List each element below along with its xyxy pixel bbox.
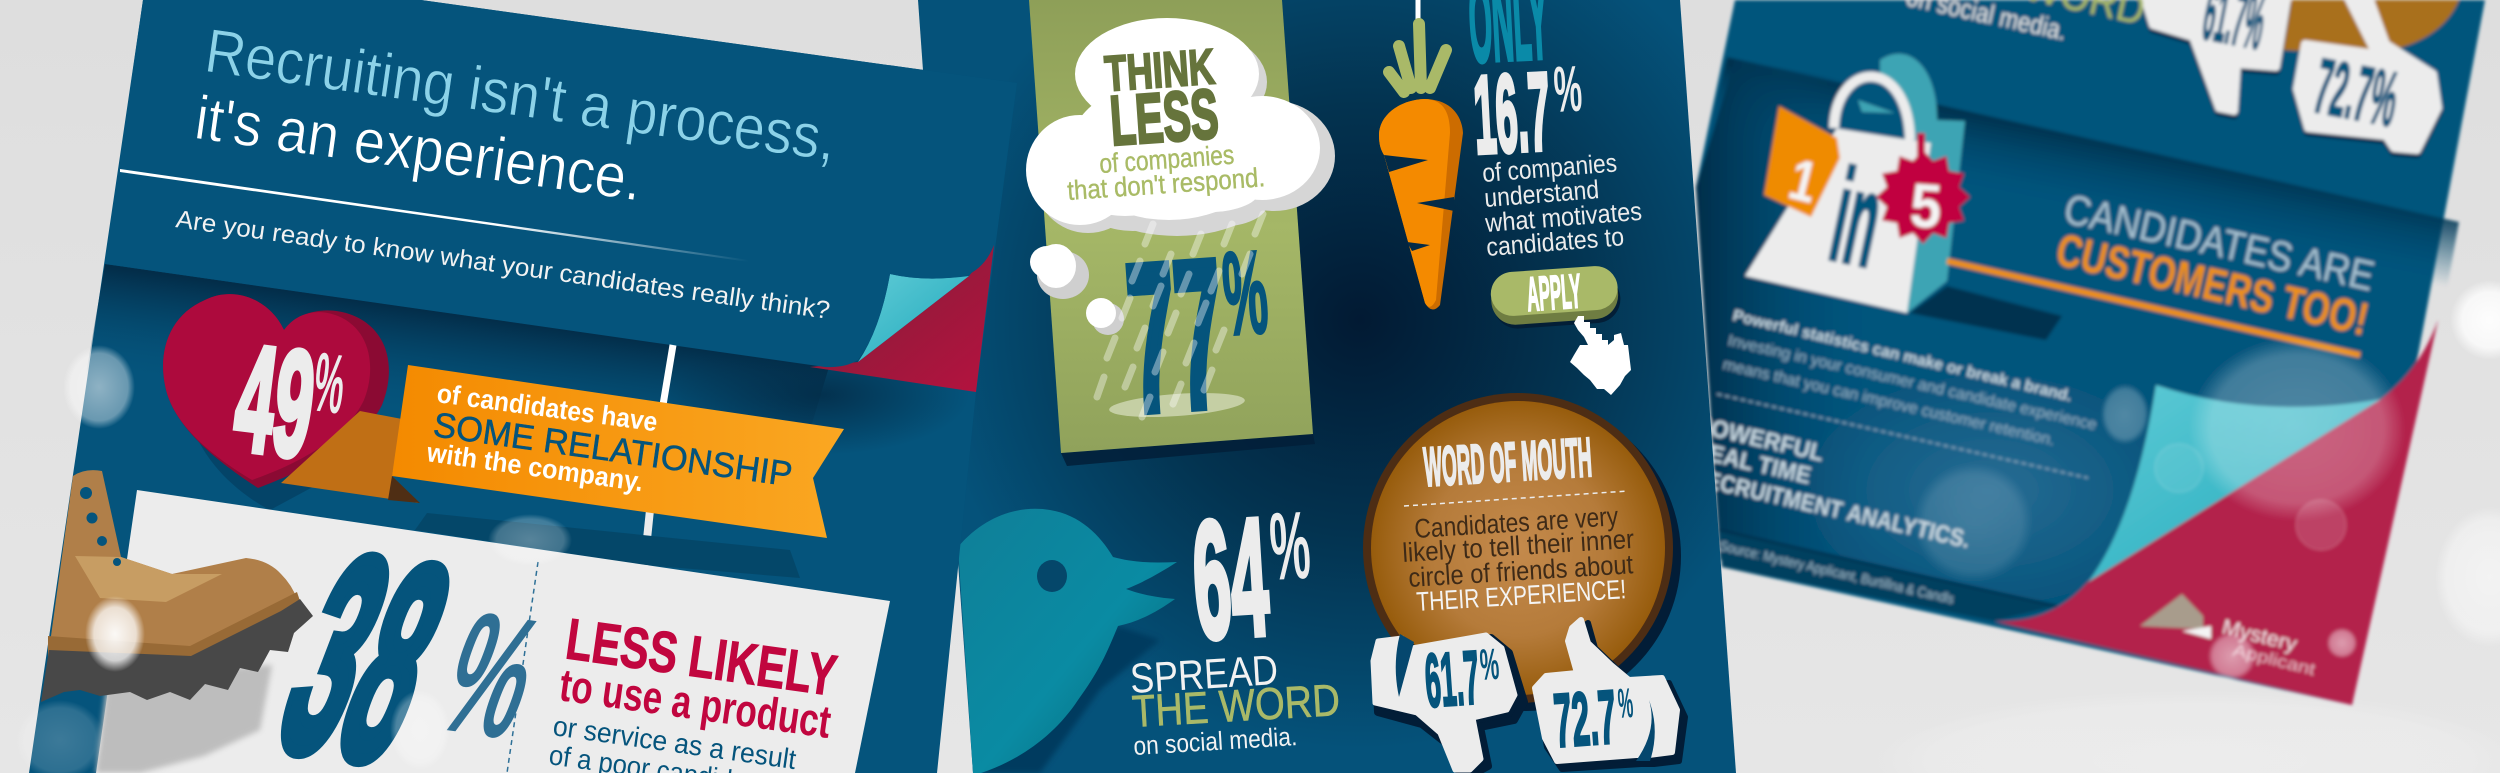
icon: thumb down xyxy=(1373,634,1524,773)
paragraph: word of mouth: likely to tell their inner xyxy=(1402,524,1635,568)
stat: 64 percent spread the word: on social media. xyxy=(1133,721,1298,761)
crimson page corner xyxy=(1994,320,2438,705)
icon: shopping bag 1 in 5: in xyxy=(1820,142,1894,295)
text: powerful real time recruitment analytics: POWERFUL xyxy=(1694,412,1826,467)
logo: mystery applicant: Mystery xyxy=(2220,616,2300,656)
text: motivates candidates: what motivates xyxy=(1483,196,1643,238)
icon: carrot on a string xyxy=(1379,0,1463,310)
icon: heart 49 percent: 49 xyxy=(227,313,323,489)
heading: candidates are customers too: CUSTOMERS TOO! xyxy=(2052,223,2373,345)
banner: some relationship: SOME RELATIONSHIP xyxy=(431,405,795,494)
stat: 64 percent spread the word: THE WORD xyxy=(1131,674,1341,737)
paragraph: word of mouth xyxy=(1402,501,1635,617)
panel: think less green card: % xyxy=(1219,226,1272,361)
stat: 77 percent xyxy=(1121,218,1272,456)
thumb up fragment xyxy=(2297,0,2438,150)
icon: rain cloud: that don't respond. xyxy=(1066,162,1266,206)
source note: Source: Mystery Applicant, Burtillna & Candls xyxy=(1718,537,1956,607)
stat: only 16.7 percent xyxy=(1466,0,1584,177)
stat: 64 percent spread the word xyxy=(1129,485,1341,761)
title: Recruiting isn't a process, xyxy=(201,17,840,174)
word of mouth fragment xyxy=(2281,0,2459,54)
text: motivates candidates: understand xyxy=(1483,174,1600,213)
panel: left poster xyxy=(15,0,1017,773)
heading: candidates are customers too xyxy=(2052,185,2379,345)
header sheet xyxy=(105,0,1017,367)
panel: word of mouth circle xyxy=(1363,393,1681,711)
icon: boot xyxy=(41,470,313,702)
text: powerful real time recruitment analytics: REAL TIME xyxy=(1691,437,1814,490)
paragraph: powerful statistics: Powerful statistics can make or break a brand. xyxy=(1731,307,2073,405)
stat: 64 percent spread the word: 64 xyxy=(1188,485,1273,674)
icon: thumb up: 72.7 xyxy=(1551,675,1619,764)
text: less likely: to use a product xyxy=(557,658,834,748)
subtitle: Are you ready to know what your candidates really think? xyxy=(174,205,832,325)
text: less likely xyxy=(547,607,841,773)
icon: thumb down: % xyxy=(1478,640,1501,690)
icon: rain cloud: LESS xyxy=(1108,75,1221,160)
icon: thumb up xyxy=(1535,620,1685,769)
banner: some relationship: of candidates have xyxy=(435,378,659,437)
panel: think less green card xyxy=(1026,0,1335,456)
stat: 64 percent spread the word: % xyxy=(1267,492,1313,601)
paragraph: powerful statistics: Investing in your consumer and candidate experience xyxy=(1726,332,2098,434)
text: powerful real time recruitment analytics xyxy=(1689,412,1972,554)
apply button xyxy=(1489,262,1622,330)
paragraph: word of mouth: Candidates are very xyxy=(1413,501,1619,544)
icon: rain cloud: of companies xyxy=(1098,140,1235,179)
icon: thumb up: % xyxy=(1616,679,1635,727)
text: less likely: LESS LIKELY xyxy=(562,607,841,709)
text: motivates candidates: candidates to xyxy=(1485,221,1625,262)
stat: 64 percent spread the word: SPREAD xyxy=(1129,646,1279,702)
panel: 38 percent white card xyxy=(41,470,890,773)
apply button: APPLY xyxy=(1525,265,1583,322)
cloud text: THINK xyxy=(1103,38,1216,102)
paragraph: powerful statistics: means that you can improve customer retention. xyxy=(1721,356,2056,449)
text: motivates candidates: of companies xyxy=(1481,147,1618,188)
icon: shopping bag 1 in 5: 1 xyxy=(1783,147,1824,216)
stat: only 16.7 percent: 16.7 xyxy=(1471,50,1553,177)
stat: 77 percent: 77 xyxy=(1121,218,1231,456)
icon: heart 49 percent: % xyxy=(309,335,350,432)
icon: shopping bag 1 in 5 xyxy=(1745,54,2062,340)
panel: word of mouth circle: WORD OF MOUTH xyxy=(1422,426,1593,498)
stat: only 16.7 percent: % xyxy=(1552,52,1584,126)
icon: pointer hand xyxy=(1570,316,1631,395)
icon: bird xyxy=(958,509,1177,773)
crimson page corner xyxy=(810,245,994,392)
icon: small clouds xyxy=(1030,244,1124,335)
teal page curl xyxy=(2088,385,2381,582)
icon: shopping bag 1 in 5: 5 xyxy=(1908,171,1944,242)
logo: mystery applicant xyxy=(2140,594,2317,679)
teal page curl xyxy=(858,274,969,362)
thumb down fragment xyxy=(2145,0,2287,111)
panel: middle poster xyxy=(918,0,1736,773)
icon: thumb down: 61.7 xyxy=(1422,635,1482,724)
paragraph: word of mouth: THEIR EXPERIENCE! xyxy=(1416,574,1627,617)
panel: right poster, blurred xyxy=(1689,0,2485,705)
banner: some relationship: with the company. xyxy=(424,437,645,497)
icon: heart 49 percent xyxy=(163,294,400,510)
icon: rain cloud xyxy=(1026,18,1335,236)
paragraph: word of mouth: circle of friends about xyxy=(1408,549,1634,593)
text: powerful real time recruitment analytics: RECRUITMENT ANALYTICS. xyxy=(1689,464,1972,554)
banner: some relationship xyxy=(281,365,844,538)
title: it's an experience. xyxy=(191,84,646,214)
logo: mystery applicant: Applicant xyxy=(2231,640,2317,679)
text: motivates candidates xyxy=(1481,147,1643,262)
heading: candidates are customers too: CANDIDATES ARE xyxy=(2060,185,2379,300)
